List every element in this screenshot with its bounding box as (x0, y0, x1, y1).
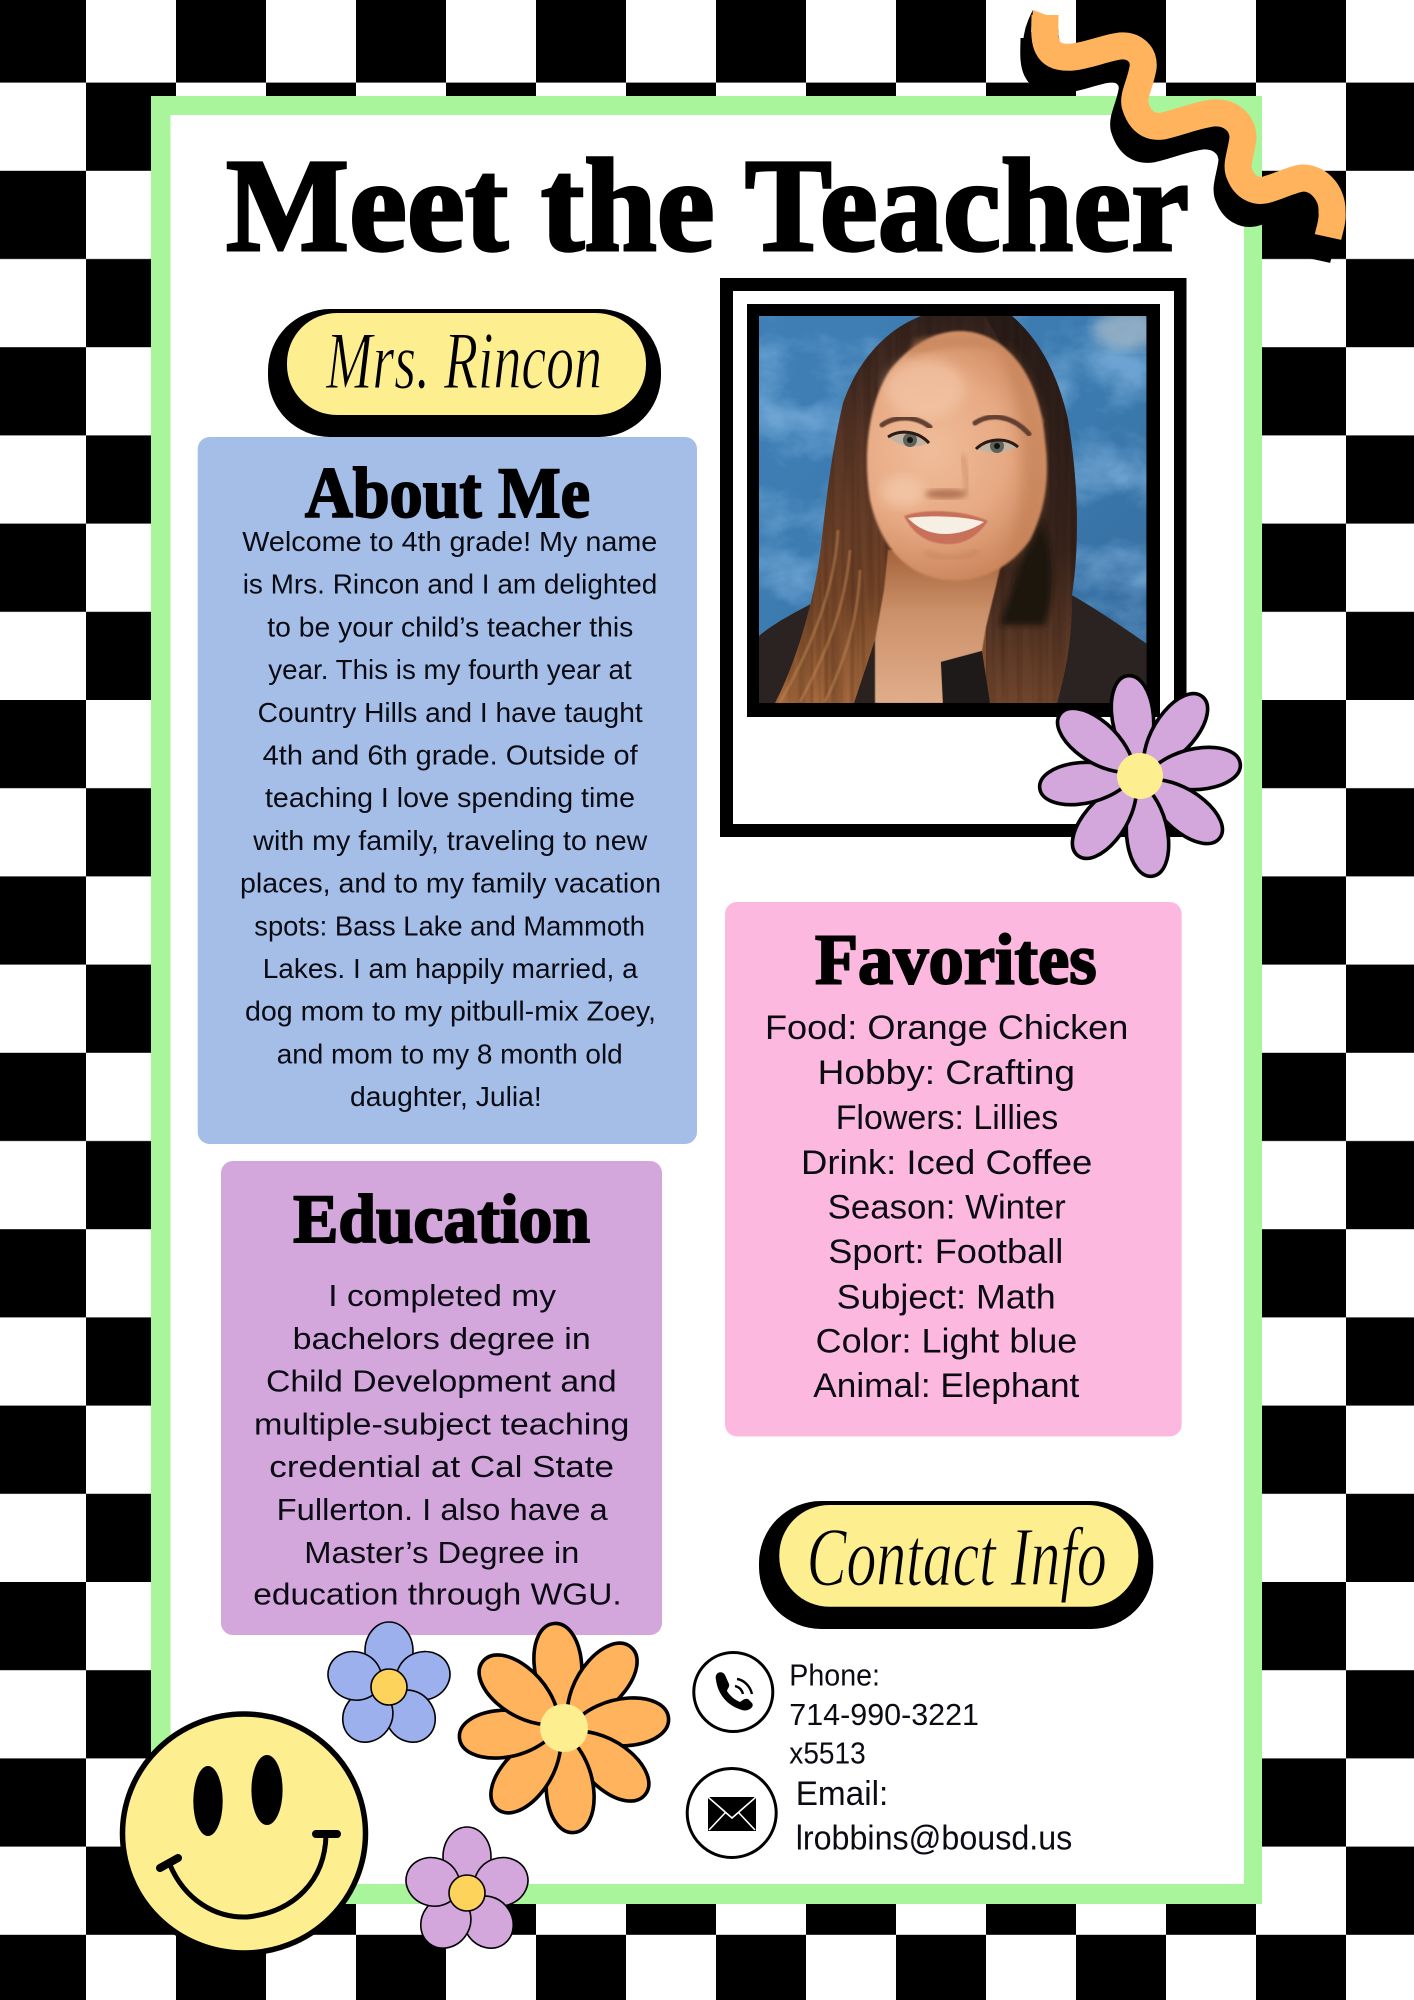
heading: about me: About Me (305, 453, 590, 533)
education text block: education through WGU. (253, 1577, 622, 1612)
about me text block: Lakes. I am happily married, a (263, 953, 638, 984)
about me text block (240, 526, 661, 1112)
icon: orange flower (449, 1613, 679, 1843)
decorative orange squiggle with black shadow (1023, 10, 1332, 260)
favorites list (765, 1009, 1128, 1405)
panel: favorites (725, 902, 1182, 1436)
education text block: Master’s Degree in (304, 1535, 579, 1570)
phone text: x5513 (789, 1735, 866, 1770)
about me text block: places, and to my family vacation (240, 868, 661, 899)
phone text: 714-990-3221 (789, 1697, 979, 1732)
favorites list: Food: Orange Chicken (765, 1009, 1128, 1047)
education text block: Child Development and (266, 1364, 617, 1399)
about me text block: spots: Bass Lake and Mammoth (254, 910, 645, 941)
name badge (268, 309, 661, 437)
name badge: Mrs. Rincon (325, 315, 602, 406)
contact info badge (759, 1501, 1153, 1629)
favorites list: Subject: Math (837, 1279, 1056, 1317)
about me text block: teaching I love spending time (265, 782, 635, 813)
photo frame with portrait (720, 278, 1186, 837)
about me text block: and mom to my 8 month old (277, 1038, 623, 1069)
about me text block: 4th and 6th grade. Outside of (263, 740, 638, 770)
icon: purple flower (400, 1827, 534, 1958)
email text (796, 1775, 1072, 1857)
education text block: I completed my (328, 1278, 557, 1313)
favorites list: Drink: Iced Coffee (801, 1144, 1092, 1182)
education text block: bachelors degree in (293, 1321, 591, 1356)
favorites list: Hobby: Crafting (818, 1054, 1075, 1092)
about me text block: daughter, Julia! (350, 1081, 542, 1112)
panel: education (221, 1161, 662, 1635)
title: Meet the Teacher (226, 131, 1189, 279)
phone text (789, 1658, 979, 1770)
about me text block: to be your child’s teacher this (267, 611, 633, 642)
favorites list: Flowers: Lillies (836, 1099, 1058, 1137)
icon: email envelope (687, 1768, 776, 1858)
education text block: Fullerton. I also have a (277, 1492, 608, 1527)
favorites list: Season: Winter (828, 1189, 1066, 1227)
heading: education: Education (293, 1181, 590, 1257)
education text block: multiple-subject teaching (254, 1406, 629, 1441)
about me text block: Welcome to 4th grade! My name (242, 526, 657, 557)
about me text block: with my family, traveling to new (252, 825, 648, 856)
favorites list: Color: Light blue (816, 1322, 1077, 1360)
education text block (253, 1278, 629, 1612)
green frame panel (151, 96, 1262, 1904)
icon: smiley face (122, 1714, 366, 1953)
icon: purple daisy on photo frame (1027, 663, 1253, 889)
panel: about me (198, 437, 697, 1144)
favorites list: Sport: Football (828, 1233, 1063, 1271)
contact info badge: Contact Info (807, 1511, 1107, 1604)
about me text block: year. This is my fourth year at (268, 654, 632, 685)
email text: Email: (796, 1775, 888, 1813)
heading: favorites: Favorites (815, 920, 1097, 1000)
phone text: Phone: (789, 1658, 880, 1693)
favorites list: Animal: Elephant (813, 1367, 1080, 1405)
about me text block: Country Hills and I have taught (258, 697, 643, 728)
about me text block: is Mrs. Rincon and I am delighted (243, 569, 657, 600)
about me text block: dog mom to my pitbull-mix Zoey, (245, 996, 656, 1027)
email text: lrobbins@bousd.us (796, 1819, 1072, 1857)
education text block: credential at Cal State (269, 1449, 614, 1484)
icon: phone (694, 1652, 773, 1732)
icon: blue flower (322, 1622, 456, 1752)
portrait illustration (759, 310, 1162, 703)
